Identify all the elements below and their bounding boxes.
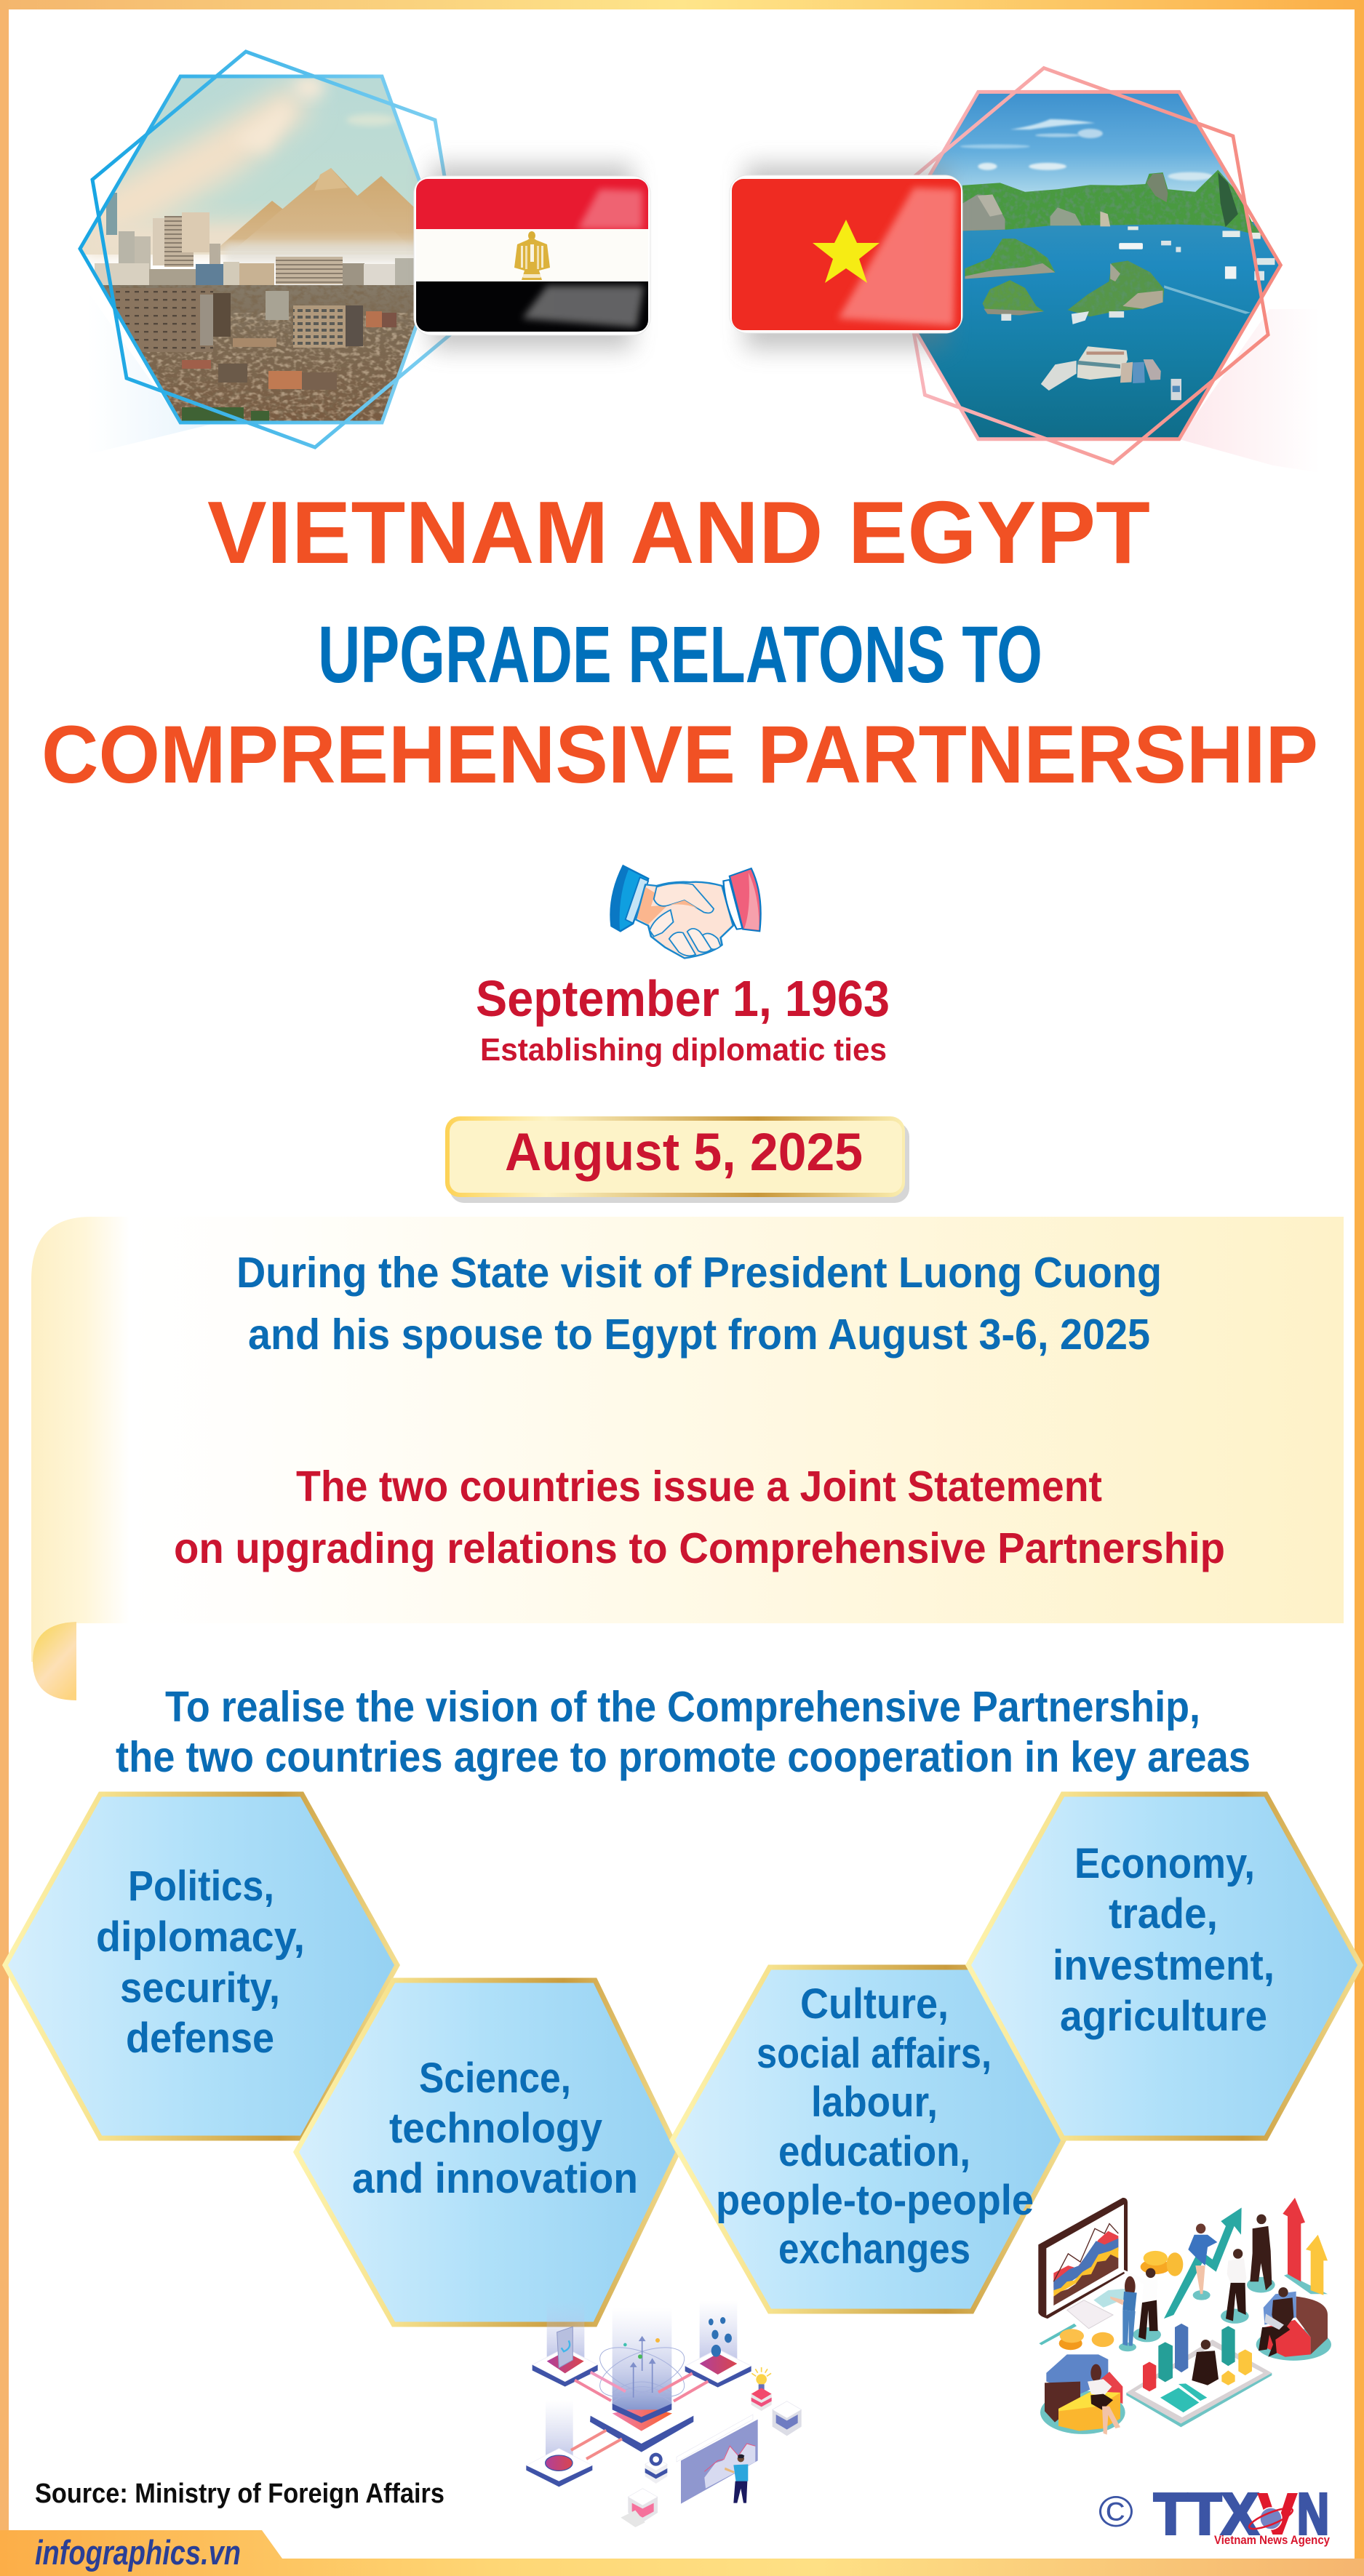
hexagon: politics [5, 1794, 397, 2138]
hexagon: economy: investment, [1053, 1942, 1275, 1989]
shadow behind flags [431, 164, 947, 349]
text: joint statement: The two countries issue a Joint Statement [296, 1463, 1102, 1511]
tablet with bars [1126, 2324, 1272, 2427]
hexagon: economy [968, 1794, 1360, 2138]
logo: TTXVN Vietnam News Agency: N [1297, 2481, 1329, 2546]
title line 2: UPGRADE RELATONS TO [318, 610, 1042, 700]
hexagon: science [296, 1980, 678, 2324]
source: Source: Ministry of Foreign Affairs [35, 2479, 444, 2509]
pale background wedge: right [1179, 309, 1320, 473]
footer bar with site tab: infographics.vn [35, 2533, 241, 2572]
flag: Egypt [414, 176, 650, 335]
flag: Vietnam [730, 175, 962, 333]
intro to key areas [116, 1683, 1251, 1781]
logo: TTXVN Vietnam News Agency: Vietnam News Agency [1214, 2533, 1330, 2547]
hexagon: culture: social affairs, [757, 2030, 992, 2077]
teal arrow [1164, 2207, 1242, 2319]
text: state visit: and his spouse to Egypt from August 3-6, 2025 [248, 1311, 1150, 1359]
text: state visit [236, 1249, 1162, 1359]
icon: star [813, 220, 880, 283]
hexagon: politics: diplomacy, [96, 1913, 305, 1961]
hexagon: economy: trade, [1109, 1890, 1218, 1937]
scroll curl [33, 1622, 76, 1700]
copyright mark: © [1098, 2487, 1133, 2536]
hexagon: culture: education, [778, 2128, 970, 2175]
coins [1059, 2251, 1183, 2350]
intro to key areas: the two countries agree to promote cooperation in key areas [116, 1733, 1251, 1781]
globe mark [1247, 2505, 1295, 2532]
pie chart with seated man [1256, 2287, 1331, 2361]
title line 3: COMPREHENSIVE PARTNERSHIP [41, 709, 1318, 800]
text: joint statement: on upgrading relations to Comprehensive Partnership [174, 1524, 1225, 1572]
text: state visit: During the State visit of President Luong Cuong [236, 1249, 1162, 1297]
illustration: business growth [1038, 2198, 1331, 2435]
up arrows [1283, 2198, 1328, 2295]
logo: TTXVN Vietnam News Agency: V [1258, 2481, 1297, 2546]
date badge: August 5, 2025: August 5, 2025 [505, 1123, 863, 1182]
photo hexagon: Ha Long Bay [874, 68, 1285, 463]
title line 1: VIETNAM AND EGYPT [207, 483, 1150, 582]
pie chart with seated woman [1040, 2354, 1125, 2435]
hexagon: culture: exchanges [778, 2225, 970, 2273]
hexagon: economy: agriculture [1060, 1993, 1267, 2040]
photo hexagon: Cairo and pyramids [73, 52, 468, 447]
date badge: August 5, 2025 [445, 1116, 909, 1203]
hexagon: culture: labour, [811, 2079, 938, 2126]
hexagon: culture: Culture, [800, 1980, 949, 2028]
footer bar with site tab [0, 2530, 1364, 2576]
monitor chart [1038, 2198, 1128, 2319]
caption: establishing diplomatic ties: Establishing diplomatic ties [480, 1032, 887, 1068]
icon: eagle of Saladin [514, 231, 550, 280]
hexagon: economy: Economy, [1074, 1840, 1255, 1887]
hexagon: politics: Politics, [128, 1863, 274, 1910]
text: joint statement [174, 1463, 1225, 1572]
hexagon: science: Science, [419, 2055, 571, 2102]
hexagon: politics: security, [120, 1964, 280, 2012]
hexagon: culture [672, 1967, 1064, 2311]
hexagon: science: technology [389, 2105, 602, 2152]
people [1110, 2215, 1275, 2351]
logo: TTXVN Vietnam News Agency: TTX [1154, 2481, 1259, 2546]
pale background wedge: left [87, 291, 218, 455]
date: September 1, 1963: September 1, 1963 [476, 970, 890, 1027]
hexagon: culture: people-to-people [716, 2177, 1034, 2224]
hexagon: politics: defense [126, 2015, 274, 2062]
panel: scroll with visit details [31, 1217, 1344, 1700]
hexagon: science: and innovation [352, 2155, 638, 2202]
intro to key areas: To realise the vision of the Comprehensive Partnership, [165, 1683, 1200, 1731]
logo: TTXVN Vietnam News Agency [1098, 2481, 1330, 2547]
icon: handshake [611, 865, 761, 958]
illustration: technology platforms [526, 2300, 802, 2527]
